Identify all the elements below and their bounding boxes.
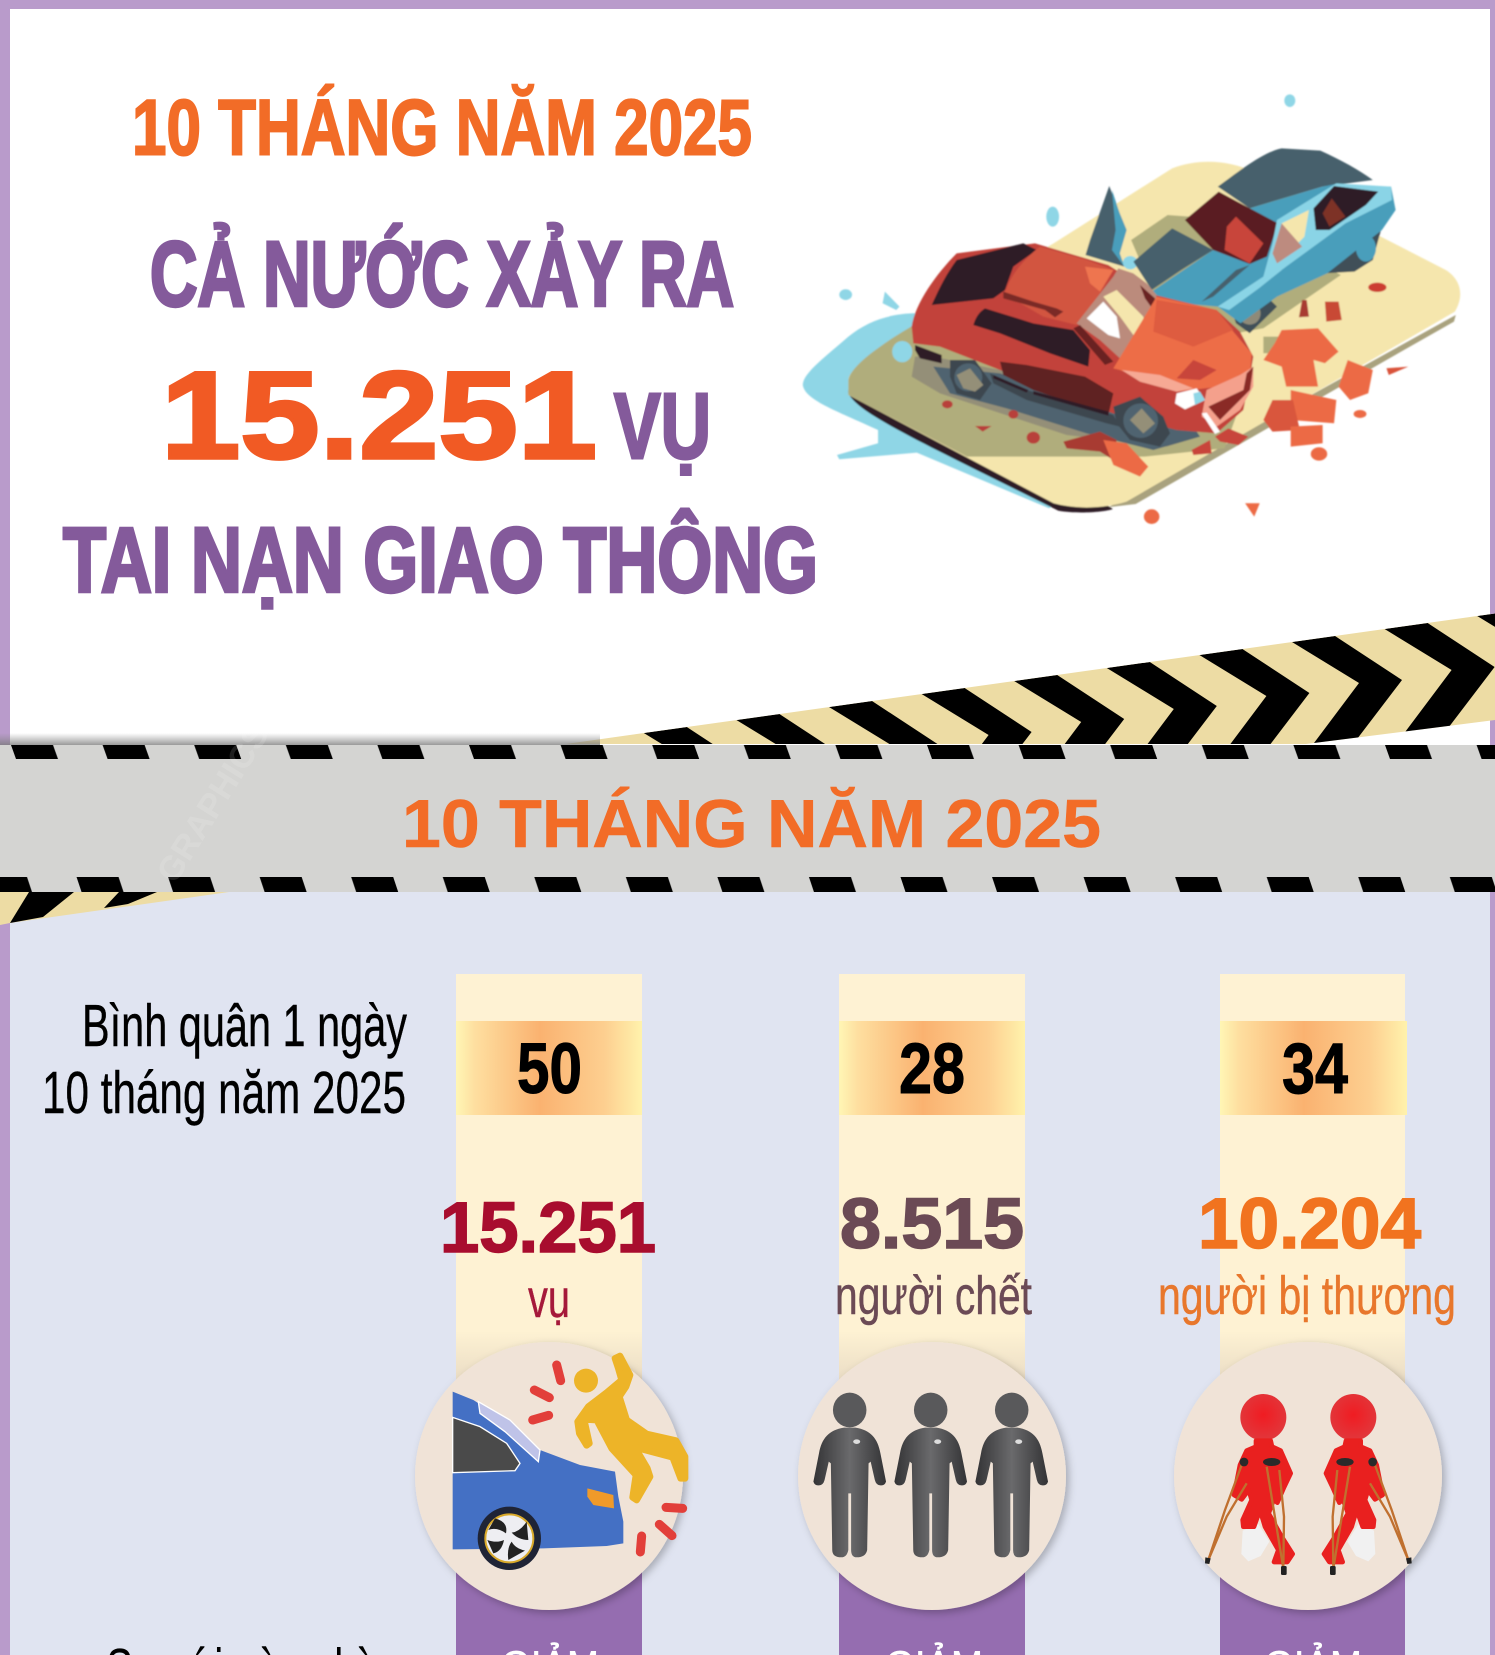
person three: [975, 1393, 1048, 1557]
blue car wheels: [1323, 227, 1382, 273]
water puddle: [803, 313, 1099, 508]
column strip: [1220, 974, 1405, 1384]
rear window: [1185, 192, 1278, 264]
orange debris: [1144, 283, 1408, 524]
grille: [1202, 367, 1253, 427]
car body: [453, 1392, 623, 1549]
column strip: [839, 974, 1025, 1384]
title line: traffic accidents: TAI NẠN GIAO THÔNG: [63, 508, 818, 612]
title line: nationwide: CẢ NƯỚC XẢY RA: [150, 222, 734, 326]
headline number 15.251: 15.251: [161, 347, 597, 485]
debris and drops: [839, 94, 1408, 524]
blue car hood: [1133, 228, 1213, 290]
title block: [63, 82, 818, 612]
page frame: purple border top panel: [0, 0, 1495, 745]
daily value: 28: [899, 1030, 965, 1109]
chevron caution tape bottom-left: [0, 892, 229, 925]
rear wheel: [950, 360, 992, 400]
icon: two red figures on crutches: [1205, 1394, 1412, 1575]
column: accidents: [415, 974, 685, 1655]
headlight: [1175, 388, 1205, 409]
decrease labels: [501, 1641, 1362, 1655]
lower body: [1000, 362, 1113, 415]
illustration: car crash: [803, 94, 1460, 524]
side window: [1314, 186, 1378, 230]
blue car body: [1149, 187, 1396, 323]
figure left: [1205, 1394, 1293, 1575]
back window: [932, 243, 1037, 305]
front wheel: [1113, 397, 1170, 447]
water drops: [839, 94, 1295, 362]
chevron caution tape top: [567, 614, 1495, 744]
column strip: [456, 974, 642, 1384]
circle: [798, 1342, 1066, 1610]
column: deaths: [798, 974, 1066, 1655]
lower panel background: [0, 892, 1495, 1655]
roof: [1003, 247, 1113, 325]
unit label: vụ: [528, 1269, 570, 1329]
daily average label: Bình quân 1 ngày: [82, 993, 407, 1059]
grey heading band: [0, 717, 1495, 892]
daily average label: [42, 993, 407, 1126]
road plate: [848, 162, 1460, 507]
person: [574, 1369, 598, 1393]
undercar shadow: [912, 357, 1200, 447]
person two: [894, 1393, 967, 1557]
total deaths: 8.515: [840, 1185, 1024, 1264]
column lower strip: [1220, 1384, 1405, 1655]
impact marks: [533, 1365, 683, 1552]
unit label: người chết: [835, 1266, 1032, 1326]
headline unit: VỤ: [614, 374, 711, 478]
road shadow olive: [848, 323, 1236, 457]
daily value box: [1220, 1021, 1407, 1115]
figure right: [1324, 1394, 1412, 1575]
daily value: 34: [1282, 1030, 1348, 1109]
circle: [1174, 1342, 1442, 1610]
column lower strip: [456, 1384, 642, 1655]
daily value: 50: [517, 1030, 582, 1109]
person one: [813, 1393, 886, 1557]
red car: [912, 243, 1253, 477]
hood: [1113, 297, 1252, 392]
daily average label: 10 tháng năm 2025: [42, 1060, 406, 1126]
red car body: [912, 243, 1253, 433]
road and blue car: [803, 148, 1460, 512]
daily value box: [839, 1021, 1025, 1115]
icon: car hitting person: [453, 1356, 685, 1570]
total accidents: 15.251: [440, 1189, 656, 1268]
road debris near car: [1063, 432, 1117, 460]
windshield: [1077, 268, 1157, 358]
icon: three grey people: [813, 1393, 1048, 1557]
watermark text: GRAPHICS: [150, 717, 277, 889]
road base edge: [848, 390, 1113, 512]
column: injured: [1158, 974, 1456, 1655]
band shadow: [0, 733, 600, 745]
title line: period: 10 THÁNG NĂM 2025: [132, 82, 752, 172]
circle: [415, 1342, 683, 1610]
band heading: 10 THÁNG NĂM 2025: [402, 786, 1101, 862]
daily value box: [456, 1021, 642, 1115]
total injured: 10.204: [1198, 1185, 1422, 1264]
wheel: [478, 1507, 541, 1570]
column lower strip: [839, 1384, 1025, 1655]
light blue trim: [1218, 183, 1392, 310]
side window: [973, 308, 1090, 367]
blue car roof: [1218, 148, 1373, 208]
blue car hood spike: [1086, 186, 1127, 267]
page background: white top panel: [0, 0, 1495, 745]
